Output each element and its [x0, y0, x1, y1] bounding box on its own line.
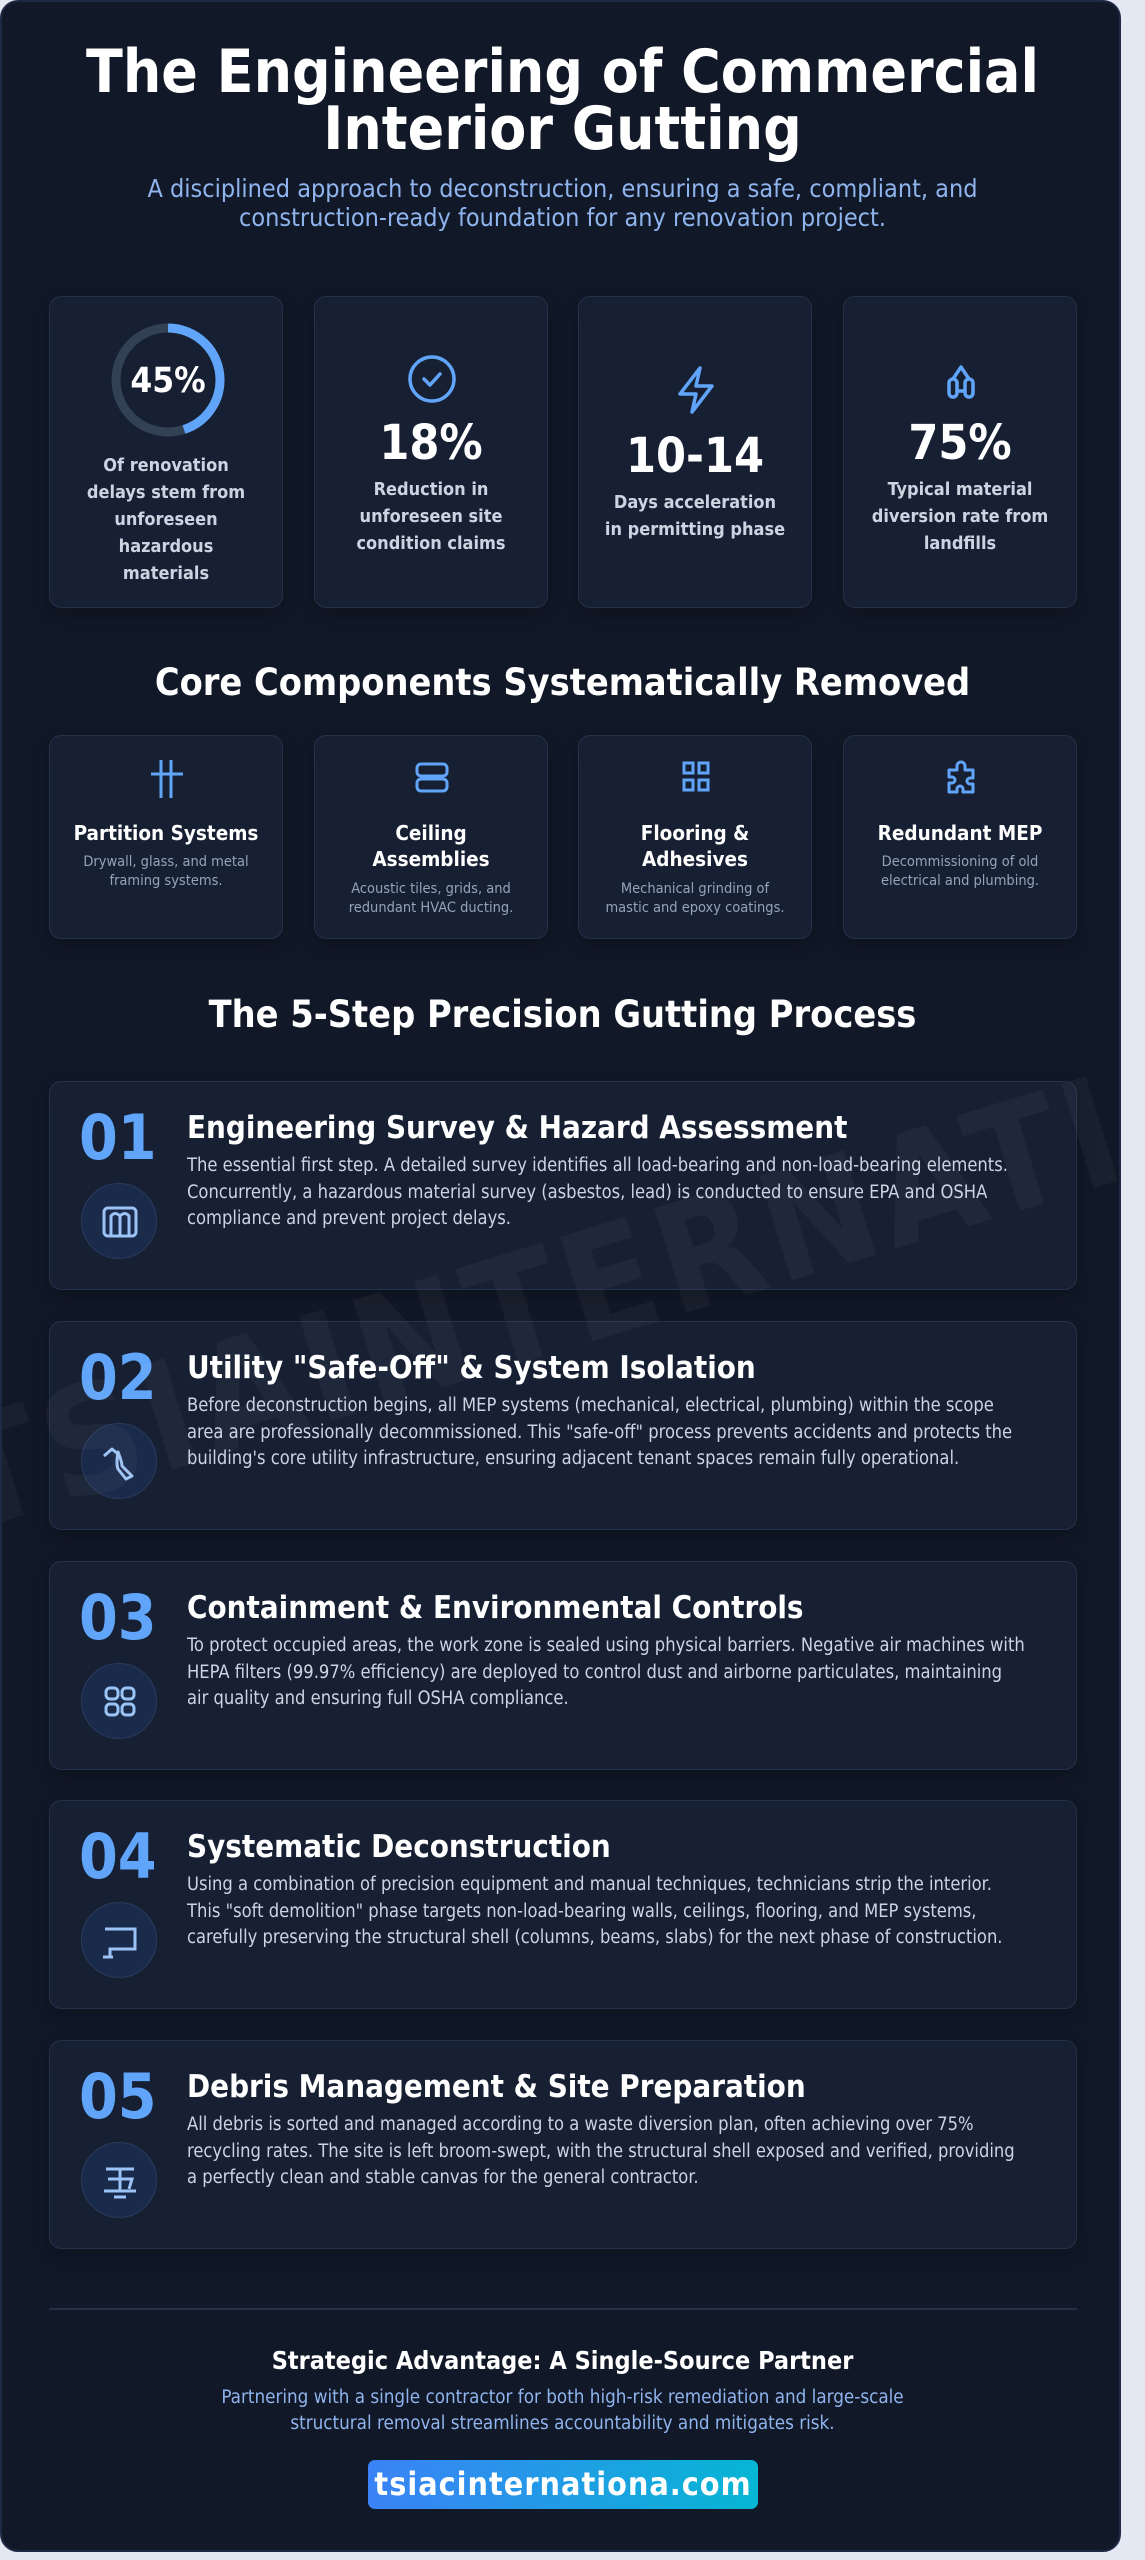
step 03: Containment & Environmental Controls [187, 1590, 804, 1626]
stat card: 10-14: 10-14 [626, 428, 764, 484]
subtitle: A disciplined approach to deconstruction, ensuring a safe, compliant, and [148, 174, 978, 203]
icon: recycle [947, 365, 975, 399]
step 03 [49, 1561, 1077, 1770]
icon: containment [81, 1663, 157, 1739]
step 05 [49, 2040, 1077, 2249]
step 04 [49, 1800, 1077, 2009]
stat card: 18%: Reduction in unforeseen site condition claims [356, 479, 506, 554]
step 05: 05 [79, 2060, 157, 2133]
stat card: 75%: 75% [908, 415, 1012, 471]
step 01: Engineering Survey & Hazard Assessment [187, 1110, 847, 1146]
heading: 5-step process: The 5-Step Precision Gutting Process [209, 992, 916, 1036]
subtitle [148, 174, 978, 232]
footer heading: Strategic Advantage: A Single-Source Partner [272, 2346, 853, 2375]
footer text: Partnering with a single contractor for both high-risk remediation and large-scale [221, 2387, 904, 2408]
title: Interior Gutting [323, 94, 802, 164]
stat card: 10-14: Days acceleration [614, 492, 776, 513]
stat card: 45%: Of renovation delays stem from unforeseen hazardous materials [87, 455, 245, 584]
component: ceiling [314, 735, 548, 939]
step 03: To protect occupied areas, the work zone is sealed using physical barriers. Negative air machines with HEPA filters (99.97% efficiency) are deployed to control dust and airborne particulates, maintaining air quality and ensuring full OSHA compliance. [187, 1635, 1025, 1709]
stat card: 18%: 18% [379, 415, 483, 471]
donut chart: 45% [130, 361, 206, 401]
icon: survey [81, 1183, 157, 1259]
component: ceiling: Ceiling [395, 821, 467, 845]
step 04: Using a combination of precision equipment and manual techniques, technicians strip the interior. This "soft demolition" phase targets non-load-bearing walls, ceilings, flooring, and MEP systems, carefully preserving the structural shell (columns, beams, slabs) for the next phase of construction. [187, 1874, 1003, 1948]
component: partition systems: Partition Systems [74, 821, 258, 845]
icon: safe-off [81, 1423, 157, 1499]
component: ceiling: Acoustic tiles, grids, and redundant HVAC ducting. [349, 881, 513, 916]
icon: check circle [408, 355, 456, 403]
step 02: Before deconstruction begins, all MEP systems (mechanical, electrical, plumbing) within the scope area are professionally decommissioned. This "safe-off" process prevents accidents and protects the building's core utility infrastructure, ensuring adjacent tenant spaces remain fully operational. [187, 1395, 1012, 1469]
step 02: 02 [79, 1341, 157, 1414]
icon: deconstruction [81, 1902, 157, 1978]
component: partition systems: Drywall, glass, and metal framing systems. [83, 854, 249, 889]
icon: partition [151, 760, 183, 798]
component: flooring: Adhesives [642, 847, 748, 871]
component: flooring: Mechanical grinding of mastic and epoxy coatings. [605, 881, 785, 916]
icon: ceiling [416, 762, 448, 792]
step 02: Utility "Safe-Off" & System Isolation [187, 1350, 756, 1386]
component: flooring: Flooring & [641, 821, 749, 845]
component: ceiling: Assemblies [372, 847, 490, 871]
step 05: Debris Management & Site Preparation [187, 2069, 806, 2105]
icon: lightning [678, 366, 714, 414]
step 03: 03 [79, 1581, 157, 1654]
step 01: 01 [79, 1101, 157, 1174]
step 01: The essential first step. A detailed survey identifies all load-bearing and non-load-bearing elements. Concurrently, a hazardous material survey (asbestos, lead) is conducted to ensure EPA and OSHA compliance and prevent project delays. [187, 1155, 1008, 1229]
title [86, 37, 1039, 164]
icon: grid [682, 762, 710, 792]
title: The Engineering of Commercial [86, 37, 1039, 107]
donut chart [112, 324, 224, 436]
stat card: 45% [49, 296, 283, 608]
component: MEP: Decommissioning of old electrical and plumbing. [881, 854, 1039, 889]
footer text: structural removal streamlines accountability and mitigates risk. [290, 2413, 835, 2434]
stat card: 10-14 [578, 296, 812, 608]
step 04: 04 [79, 1820, 157, 1893]
stat card: 10-14: in permitting phase [605, 519, 785, 540]
heading: core components: Core Components Systematically Removed [155, 660, 970, 704]
stat card: 75% [843, 296, 1077, 608]
step 05: All debris is sorted and managed according to a waste diversion plan, often achieving over 75% recycling rates. The site is left broom-swept, with the structural shell exposed and verified, providing a perfectly clean and stable canvas for the general contractor. [187, 2114, 1015, 2188]
stat card: 18% [314, 296, 548, 608]
icon: puzzle [948, 760, 974, 794]
website button: tsiacinternationa.com [374, 2465, 752, 2503]
icon: site prep [81, 2142, 157, 2218]
step 02 [49, 1321, 1077, 1530]
component: MEP: Redundant MEP [878, 821, 1042, 845]
footer text [221, 2387, 904, 2434]
step 01 [49, 1081, 1077, 1290]
component: MEP [843, 735, 1077, 939]
stat card: 75%: Typical material diversion rate from landfills [872, 479, 1048, 554]
subtitle: construction-ready foundation for any renovation project. [239, 203, 886, 232]
component: flooring [578, 735, 812, 939]
component: partition systems [49, 735, 283, 939]
step 04: Systematic Deconstruction [187, 1829, 611, 1865]
